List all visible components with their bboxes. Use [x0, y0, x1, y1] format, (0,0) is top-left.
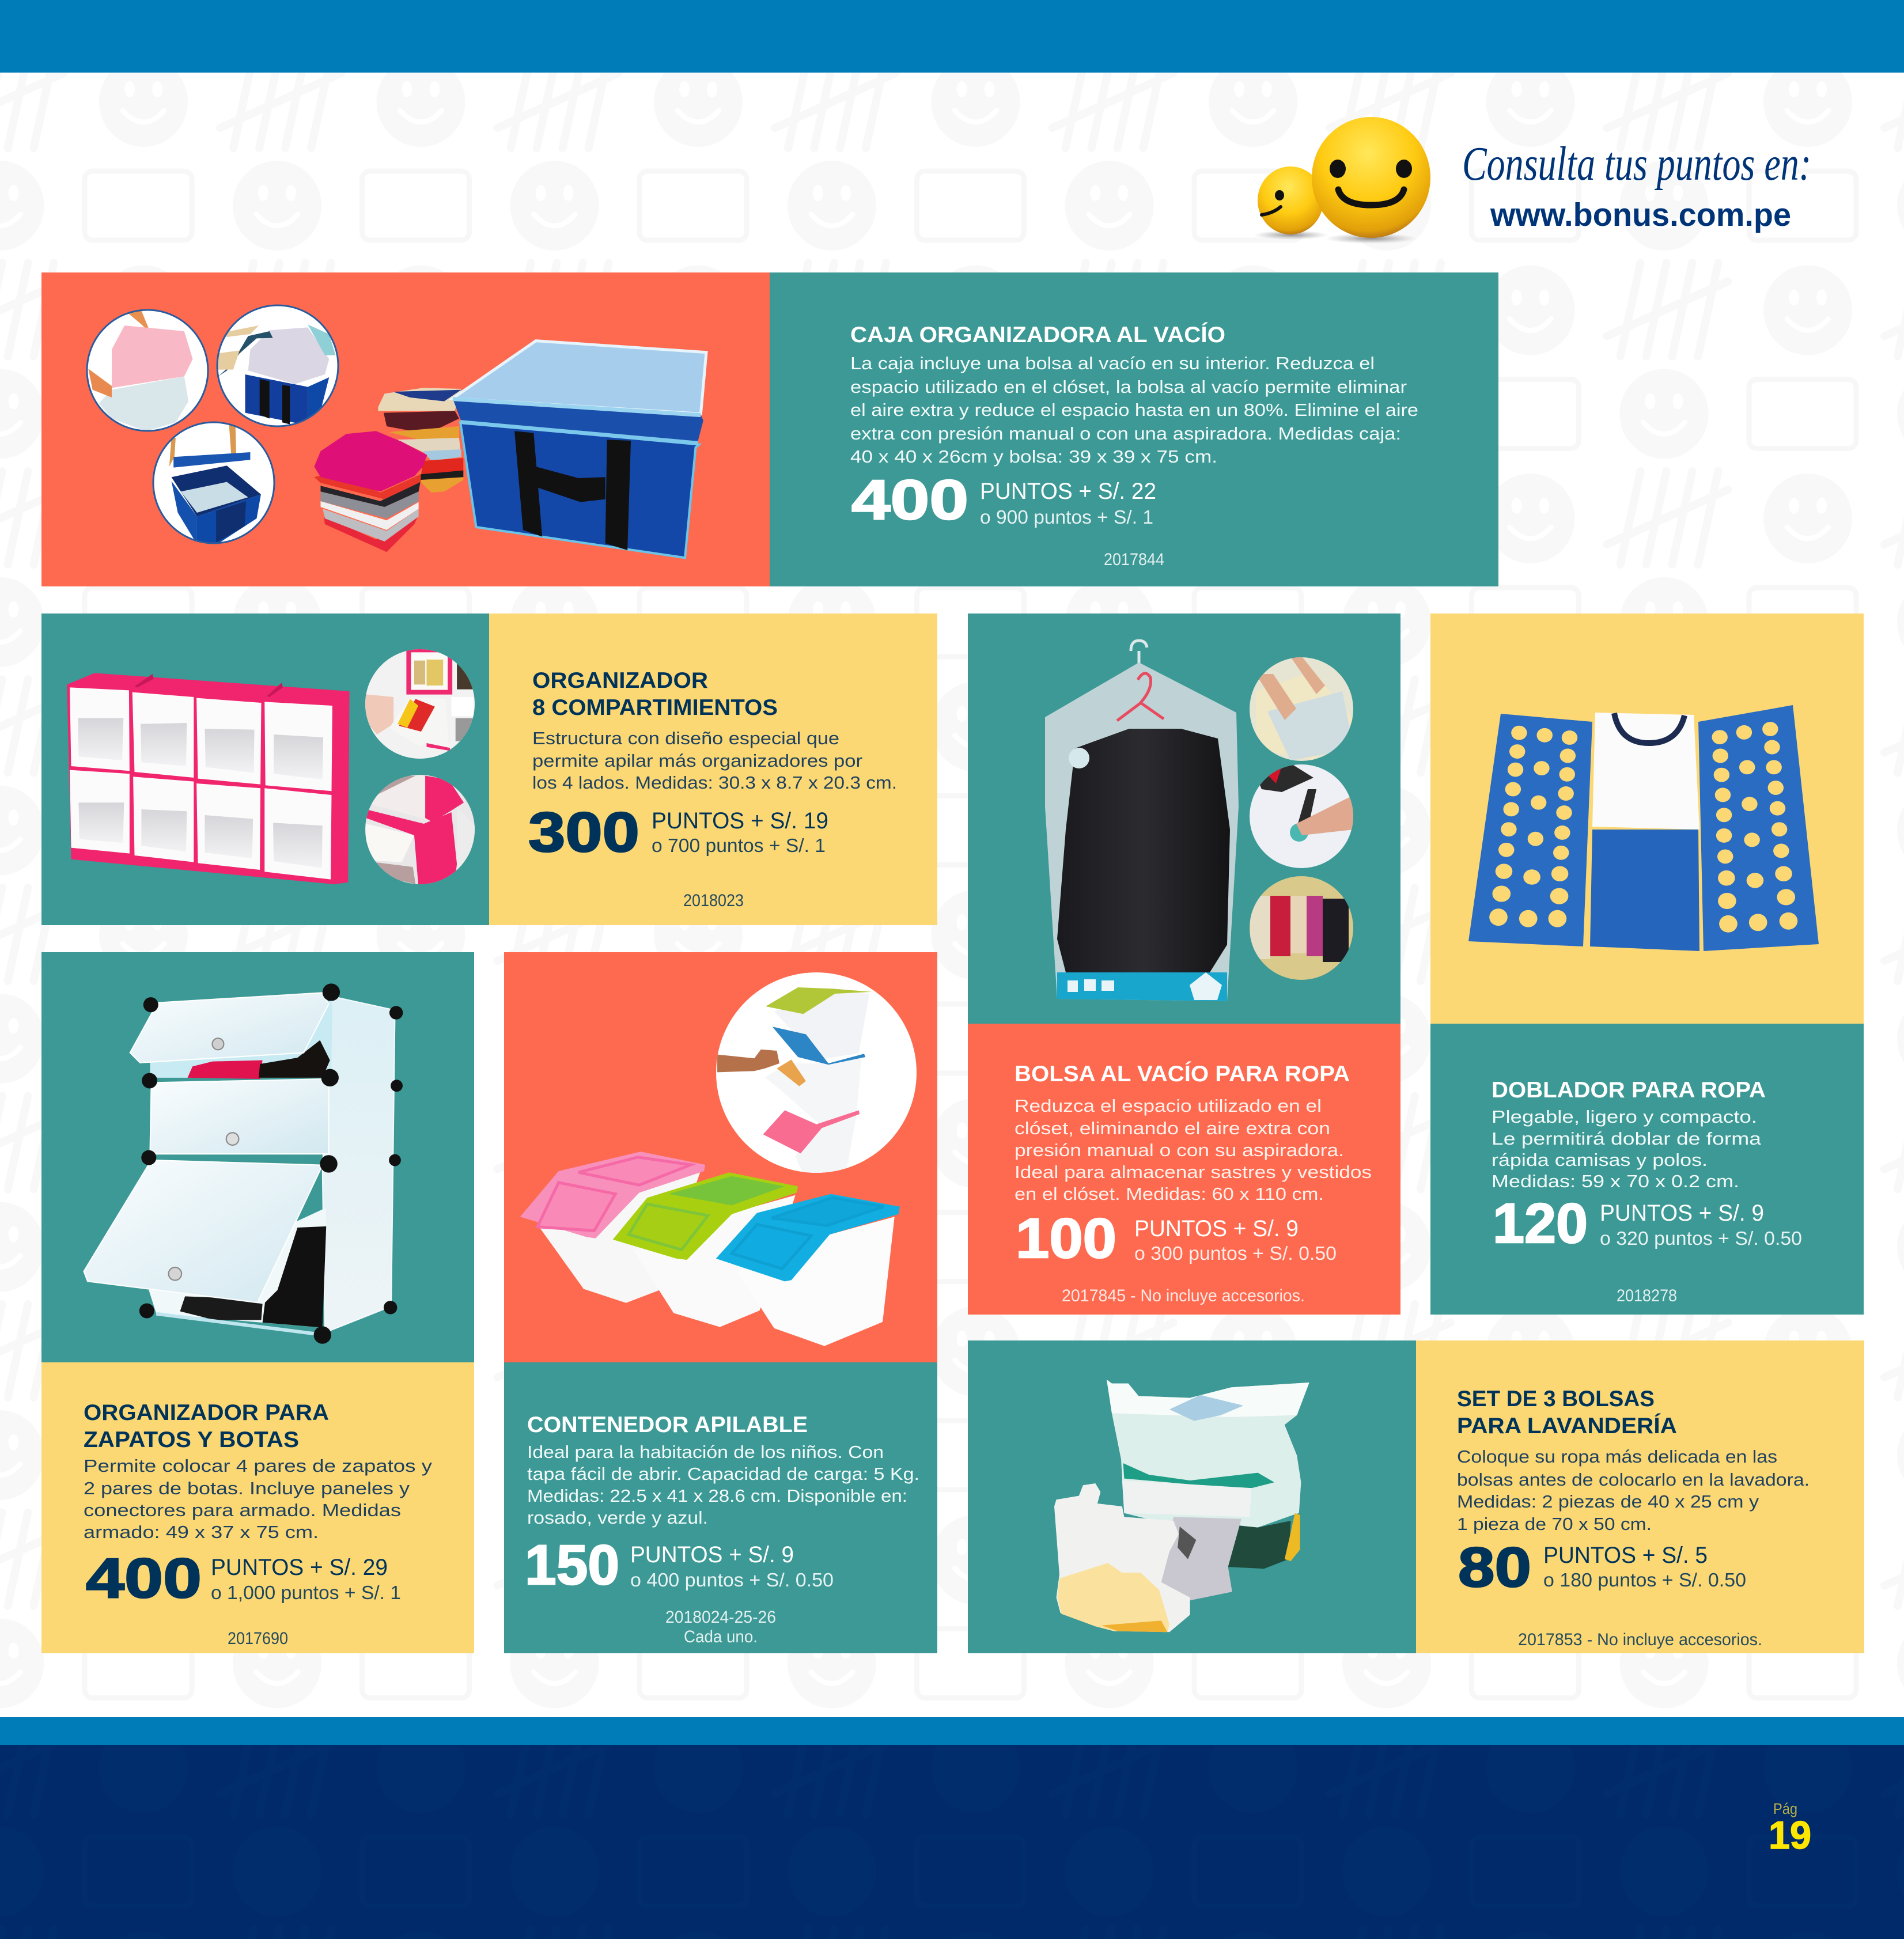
title: ORGANIZADOR	[532, 668, 708, 693]
icon: large smiley	[1312, 117, 1430, 244]
price: 400	[86, 1547, 202, 1609]
shoe rack	[84, 983, 403, 1344]
price	[851, 468, 1156, 531]
text background	[968, 1024, 1400, 1315]
text background	[489, 613, 937, 925]
description: Medidas: 22.5 x 41 x 28.6 cm. Disponible en:	[527, 1486, 907, 1506]
description: Medidas: 59 x 70 x 0.2 cm.	[1492, 1171, 1739, 1191]
text background	[41, 1362, 474, 1653]
description: 40 x 40 x 26cm y bolsa: 39 x 39 x 75 cm.	[850, 446, 1217, 467]
description: clóset, eliminando el aire extra con	[1015, 1118, 1330, 1138]
text background	[770, 272, 1498, 586]
product code: 2018024-25-26	[665, 1608, 776, 1627]
panel: organizador para zapatos y botas	[41, 952, 474, 1653]
image background	[41, 272, 770, 586]
price	[1016, 1207, 1337, 1270]
product code: 2018278	[1617, 1286, 1677, 1305]
description: presión manual o con su aspiradora.	[1015, 1140, 1344, 1160]
container: blue	[716, 1194, 900, 1346]
product code: 2017690	[228, 1629, 288, 1648]
container: green	[613, 1172, 798, 1327]
panel: bolsa al vacío para ropa	[968, 613, 1400, 1315]
product code: 2017853 - No incluye accesorios.	[1518, 1630, 1762, 1649]
garment bag	[1045, 641, 1239, 1001]
description	[1457, 1446, 1810, 1534]
description: rosado, verde y azul.	[527, 1508, 708, 1528]
description: armado: 49 x 37 x 75 cm.	[84, 1522, 319, 1542]
description: rápida camisas y polos.	[1492, 1150, 1708, 1170]
title	[1457, 1387, 1677, 1438]
header: bonus smileys and website	[1254, 117, 1811, 244]
laundry bags	[1054, 1380, 1309, 1632]
price: 80	[1458, 1536, 1531, 1599]
price: PUNTOS + S/. 5	[1543, 1543, 1708, 1568]
image background	[968, 1340, 1416, 1653]
panel: doblador para ropa	[1430, 613, 1864, 1315]
product code: Cada uno.	[684, 1627, 758, 1646]
detail circle: vacuum	[1250, 763, 1354, 868]
detail circle: closet	[1250, 876, 1353, 980]
description: Coloque su ropa más delicada en las	[1457, 1446, 1777, 1467]
folding board	[1468, 705, 1819, 951]
description: los 4 lados. Medidas: 30.3 x 8.7 x 20.3 cm.	[532, 772, 897, 793]
price: 120	[1493, 1192, 1588, 1255]
price	[525, 1533, 834, 1596]
bottom footer band	[0, 1717, 1904, 1939]
price: o 900 puntos + S/. 1	[980, 506, 1153, 528]
text background	[1416, 1340, 1864, 1653]
price: PUNTOS + S/. 9	[630, 1542, 794, 1567]
panel: contenedor apilable	[504, 952, 937, 1653]
description	[1492, 1107, 1762, 1191]
price: PUNTOS + S/. 29	[211, 1555, 388, 1580]
panel: organizador 8 compartimientos	[41, 613, 937, 925]
product code	[665, 1608, 776, 1646]
description: Ideal para almacenar sastres y vestidos	[1015, 1162, 1372, 1182]
price: PUNTOS + S/. 9	[1600, 1200, 1764, 1226]
clothing piles	[314, 388, 463, 552]
image background	[41, 613, 489, 925]
description	[1015, 1096, 1372, 1204]
price: o 1,000 puntos + S/. 1	[211, 1582, 401, 1603]
icon: small smiley	[1254, 166, 1328, 240]
text background	[504, 1362, 937, 1653]
detail circle: hand	[365, 649, 475, 759]
text background	[1430, 1024, 1864, 1315]
container: pink	[520, 1152, 705, 1303]
image background	[968, 613, 1400, 1024]
price: o 180 puntos + S/. 0.50	[1543, 1569, 1746, 1590]
title: PARA LAVANDERÍA	[1457, 1413, 1677, 1438]
description	[850, 353, 1418, 467]
description: 1 pieza de 70 x 50 cm.	[1457, 1514, 1652, 1534]
price: PUNTOS + S/. 22	[980, 479, 1156, 504]
description: Medidas: 2 piezas de 40 x 25 cm y	[1457, 1491, 1759, 1512]
connectors	[139, 983, 403, 1344]
product code: 2017844	[1104, 550, 1164, 569]
description: espacio utilizado en el clóset, la bolsa al vacío permite eliminar	[850, 377, 1407, 397]
description: Le permitirá doblar de forma	[1492, 1128, 1762, 1149]
price: o 700 puntos + S/. 1	[652, 835, 826, 856]
title: DOBLADOR PARA ROPA	[1492, 1078, 1766, 1103]
photo circle: filling bag	[87, 310, 208, 431]
description: el aire extra y reduce el espacio hasta en un 80%. Elimine el aire	[850, 400, 1418, 420]
photo circle: vacuuming	[217, 305, 338, 426]
detail circle: stacked containers	[716, 972, 917, 1175]
description: extra con presión manual o con una aspiradora. Medidas caja:	[850, 423, 1401, 444]
website: www.bonus.com.pe	[1490, 196, 1791, 233]
product code: 2017845 - No incluye accesorios.	[1062, 1286, 1305, 1305]
price: PUNTOS + S/. 19	[652, 808, 828, 834]
description: Plegable, ligero y compacto.	[1492, 1107, 1757, 1127]
description: Ideal para la habitación de los niños. Con	[527, 1442, 884, 1462]
top blue band	[0, 0, 1904, 73]
price	[528, 801, 828, 864]
title: BOLSA AL VACÍO PARA ROPA	[1015, 1061, 1350, 1086]
description: conectores para armado. Medidas	[84, 1500, 401, 1520]
price: o 320 puntos + S/. 0.50	[1600, 1228, 1802, 1249]
description: Estructura con diseño especial que	[532, 728, 839, 748]
description: Permite colocar 4 pares de zapatos y	[84, 1456, 433, 1476]
page number: 19	[1769, 1813, 1811, 1857]
image background	[1430, 613, 1864, 1024]
detail circle: rolling	[1250, 657, 1354, 761]
description: bolsas antes de colocarlo en la lavadora.	[1457, 1470, 1810, 1490]
organizer box	[453, 341, 706, 558]
description	[532, 728, 897, 793]
title: SET DE 3 BOLSAS	[1457, 1387, 1655, 1411]
title	[532, 668, 778, 720]
description	[527, 1442, 919, 1528]
description: tapa fácil de abrir. Capacidad de carga: 5 Kg.	[527, 1464, 919, 1484]
price: 100	[1016, 1207, 1116, 1270]
price: 150	[525, 1533, 619, 1596]
description: La caja incluye una bolsa al vacío en su interior. Reduzca el	[850, 353, 1375, 373]
detail circle: stacking	[365, 775, 475, 885]
title: 8 COMPARTIMIENTOS	[532, 695, 778, 720]
panel: caja organizadora al vacío	[41, 272, 1498, 586]
price: 400	[851, 468, 968, 531]
description: Reduzca el espacio utilizado en el	[1015, 1096, 1322, 1116]
panel: set de 3 bolsas para lavandería	[968, 1340, 1864, 1653]
price: PUNTOS + S/. 9	[1134, 1216, 1299, 1241]
page number: Pág	[1773, 1800, 1797, 1817]
photo circle: box open	[153, 422, 274, 544]
price: 300	[528, 801, 639, 864]
pink organizer	[67, 673, 350, 884]
title: CAJA ORGANIZADORA AL VACÍO	[850, 322, 1225, 347]
image background	[504, 952, 937, 1362]
description	[84, 1456, 433, 1542]
title: ORGANIZADOR PARA	[84, 1400, 329, 1425]
price: o 400 puntos + S/. 0.50	[630, 1569, 834, 1590]
description: 2 pares de botas. Incluye paneles y	[84, 1478, 410, 1498]
price	[1458, 1536, 1746, 1599]
price	[1493, 1192, 1802, 1255]
image background	[41, 952, 474, 1362]
product code: 2018023	[683, 891, 744, 910]
title: ZAPATOS Y BOTAS	[84, 1427, 299, 1452]
title	[84, 1400, 329, 1452]
description: en el clóset. Medidas: 60 x 110 cm.	[1015, 1184, 1324, 1204]
description: permite apilar más organizadores por	[532, 751, 862, 771]
price: o 300 puntos + S/. 0.50	[1134, 1243, 1337, 1264]
price	[86, 1547, 401, 1609]
title: CONTENEDOR APILABLE	[527, 1412, 808, 1437]
